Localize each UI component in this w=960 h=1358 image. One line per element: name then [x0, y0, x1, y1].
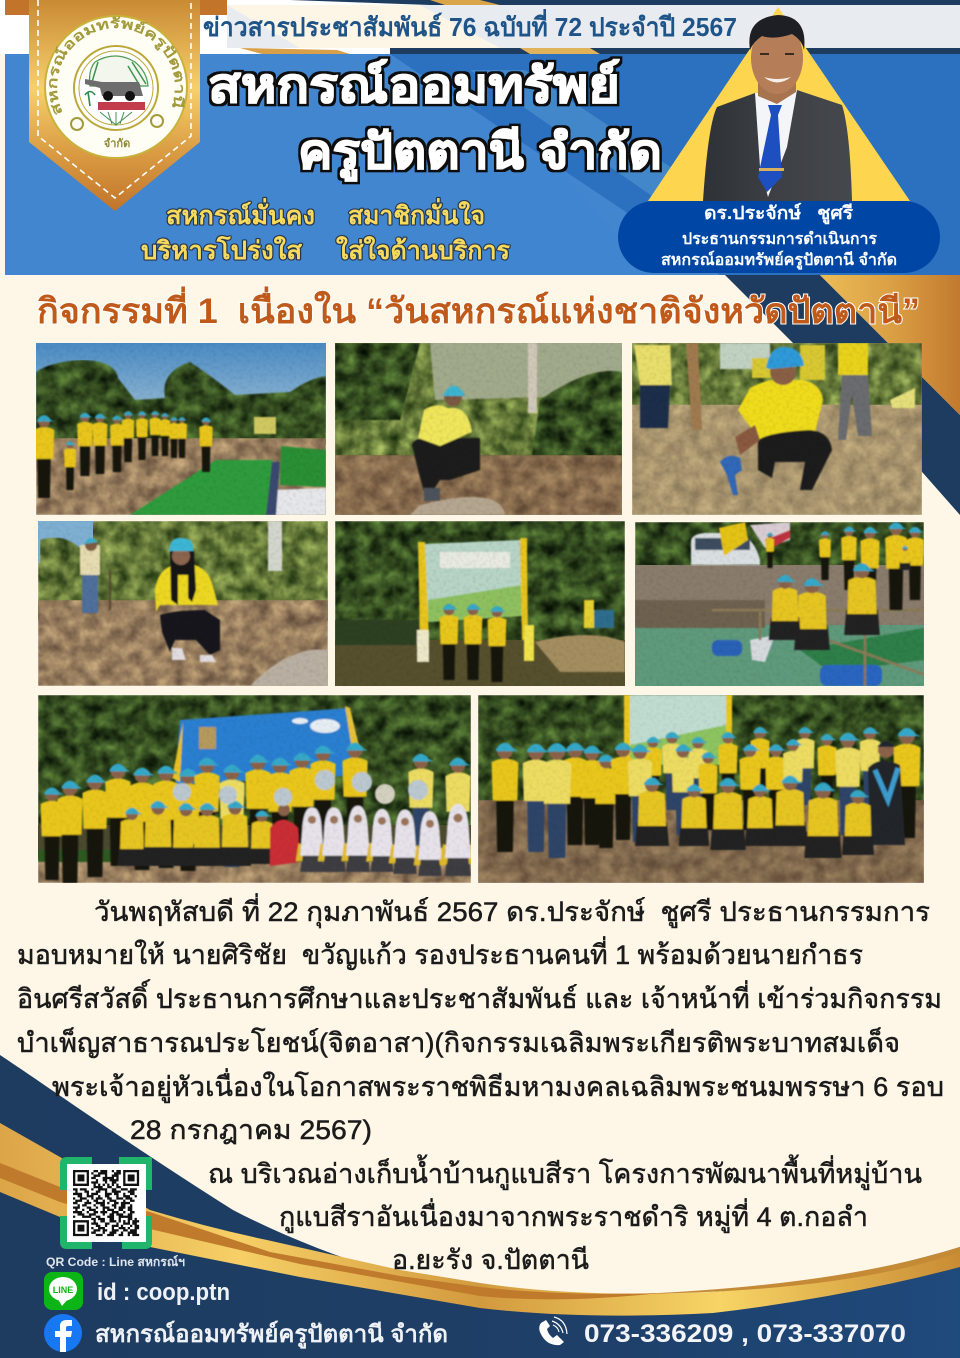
title: สหกรณ์ออมทรัพย์	[208, 59, 620, 113]
shirt	[755, 90, 797, 197]
photo 7: large group with blue banner	[38, 695, 471, 883]
photo 5: group with project banner	[335, 521, 625, 686]
ribbon tabs	[5, 0, 227, 15]
body text: อ.ยะรัง จ.ปัตตานี	[392, 1245, 589, 1275]
neck and head	[758, 75, 796, 104]
Facebook page name: สหกรณ์ออมทรัพย์ครูปัตตานี จำกัด	[95, 1320, 448, 1349]
bottom decoration: navy and gold swoosh	[0, 1055, 960, 1358]
body text: อินศรีสวัสดิ์ ประธานการศึกษาและประชาสัมพันธ์ และ เจ้าหน้าที่ เข้าร่วมกิจกรรม	[17, 979, 942, 1014]
yellow triangle	[648, 7, 910, 201]
activity heading: กิจกรรมที่ 1 เนื่องใน “วันสหกรณ์แห่งชาติจังหวัดปัตตานี”	[37, 286, 920, 331]
top headline: ข่าวสารประชาสัมพันธ์ 76 ฉบับที่ 72 ประจำปี 2567	[203, 8, 737, 42]
photo 8: group holding saplings	[478, 695, 924, 883]
header: blue panel	[5, 54, 960, 275]
slogans: บริหารโปร่งใส	[141, 235, 303, 265]
body text	[17, 893, 944, 1275]
body text: วันพฤหัสบดี ที่ 22 กุมภาพันธ์ 2567 ดร.ประจักษ์ ชูศรี ประธานกรรมการ	[94, 893, 930, 929]
QR caption: QR Code : Line สหกรณ์ฯ	[46, 1255, 185, 1269]
emblem: สหกรณ์ออมทรัพย์ครูปัตตานี	[49, 16, 185, 115]
name plate: ประธานกรรมการดำเนินการ	[682, 230, 877, 248]
icon: LINE	[44, 1272, 83, 1310]
icon: LINE: LINE	[53, 1285, 73, 1295]
title: ครูปัตตานี จำกัด	[298, 126, 662, 182]
slogans	[141, 198, 511, 265]
body text: ณ บริเวณอ่างเก็บน้ำบ้านกูแบสีรา โครงการพัฒนาพื้นที่หมู่บ้าน	[208, 1154, 922, 1190]
photo 6: releasing fish from a raft	[635, 522, 924, 686]
slogans: สหกรณ์มั่นคง	[166, 198, 315, 230]
body text: กูแบสีราอันเนื่องมาจากพระราชดำริ หมู่ที่ 4 ต.กอลำ	[279, 1198, 868, 1233]
name plate	[618, 201, 940, 273]
body text: บำเพ็ญสาธารณประโยชน์(จิตอาสา)(กิจกรรมเฉลิมพระเกียรติพระบาทสมเด็จ	[17, 1025, 900, 1058]
navy swoosh	[0, 1055, 960, 1358]
corner decoration: navy and gold diagonal bands	[725, 275, 960, 515]
body text: พระเจ้าอยู่หัวเนื่องในโอกาสพระราชพิธีมหามงคลเฉลิมพระชนมพรรษา 6 รอบ	[52, 1068, 944, 1103]
suit	[703, 90, 852, 201]
photo 2: man planting a tree	[335, 343, 622, 515]
photo 1: lined-up participants on lawn	[36, 343, 326, 515]
phone numbers: 073-336209 , 073-337070	[584, 1320, 906, 1348]
photo 4: woman crouching by sapling	[38, 521, 328, 686]
ribbon stitching	[38, 0, 191, 198]
emblem: จำกัด	[104, 137, 130, 150]
name plate: ดร.ประจักษ์ ชูศรี	[704, 202, 853, 225]
top banner: newsletter bar and stripes	[0, 0, 960, 54]
icon: Facebook	[44, 1314, 82, 1352]
name plate: สหกรณ์ออมทรัพย์ครูปัตตานี จำกัด	[661, 250, 897, 271]
icon: phone	[539, 1317, 567, 1345]
slogans: ใส่ใจด้านบริการ	[336, 235, 511, 265]
slogans: สมาชิกมั่นใจ	[348, 198, 485, 230]
portrait: chairman on yellow triangle	[648, 7, 910, 201]
ribbon body	[29, 0, 200, 211]
title	[208, 59, 662, 182]
tie	[758, 105, 782, 192]
body text: 28 กรกฎาคม 2567)	[130, 1115, 372, 1145]
ribbon with emblem	[5, 0, 227, 211]
LINE id: id : coop.ptn	[97, 1279, 230, 1306]
darker gold band	[0, 1163, 660, 1299]
body text: มอบหมายให้ นายศิริชัย ขวัญแก้ว รองประธานคนที่ 1 พร้อมด้วยนายกำธร	[17, 936, 863, 970]
gold swoosh	[0, 1123, 960, 1316]
QR code with green frame	[60, 1157, 152, 1249]
photo 3: chairman watering sapling	[632, 343, 922, 515]
